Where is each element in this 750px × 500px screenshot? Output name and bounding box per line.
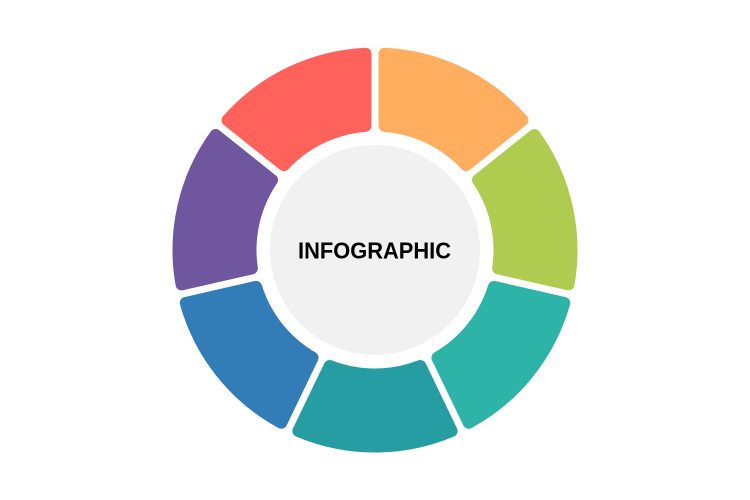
segment: dark teal bbox=[298, 366, 452, 447]
segment: orange bbox=[356, 40, 529, 179]
segment: blue bbox=[174, 262, 332, 432]
center circle bbox=[270, 145, 480, 355]
segment: red bbox=[221, 40, 394, 179]
title: INFOGRAPHIC bbox=[298, 238, 451, 264]
segment: green bbox=[471, 132, 584, 299]
segment: purple bbox=[166, 132, 279, 299]
segment: teal bbox=[418, 262, 576, 432]
